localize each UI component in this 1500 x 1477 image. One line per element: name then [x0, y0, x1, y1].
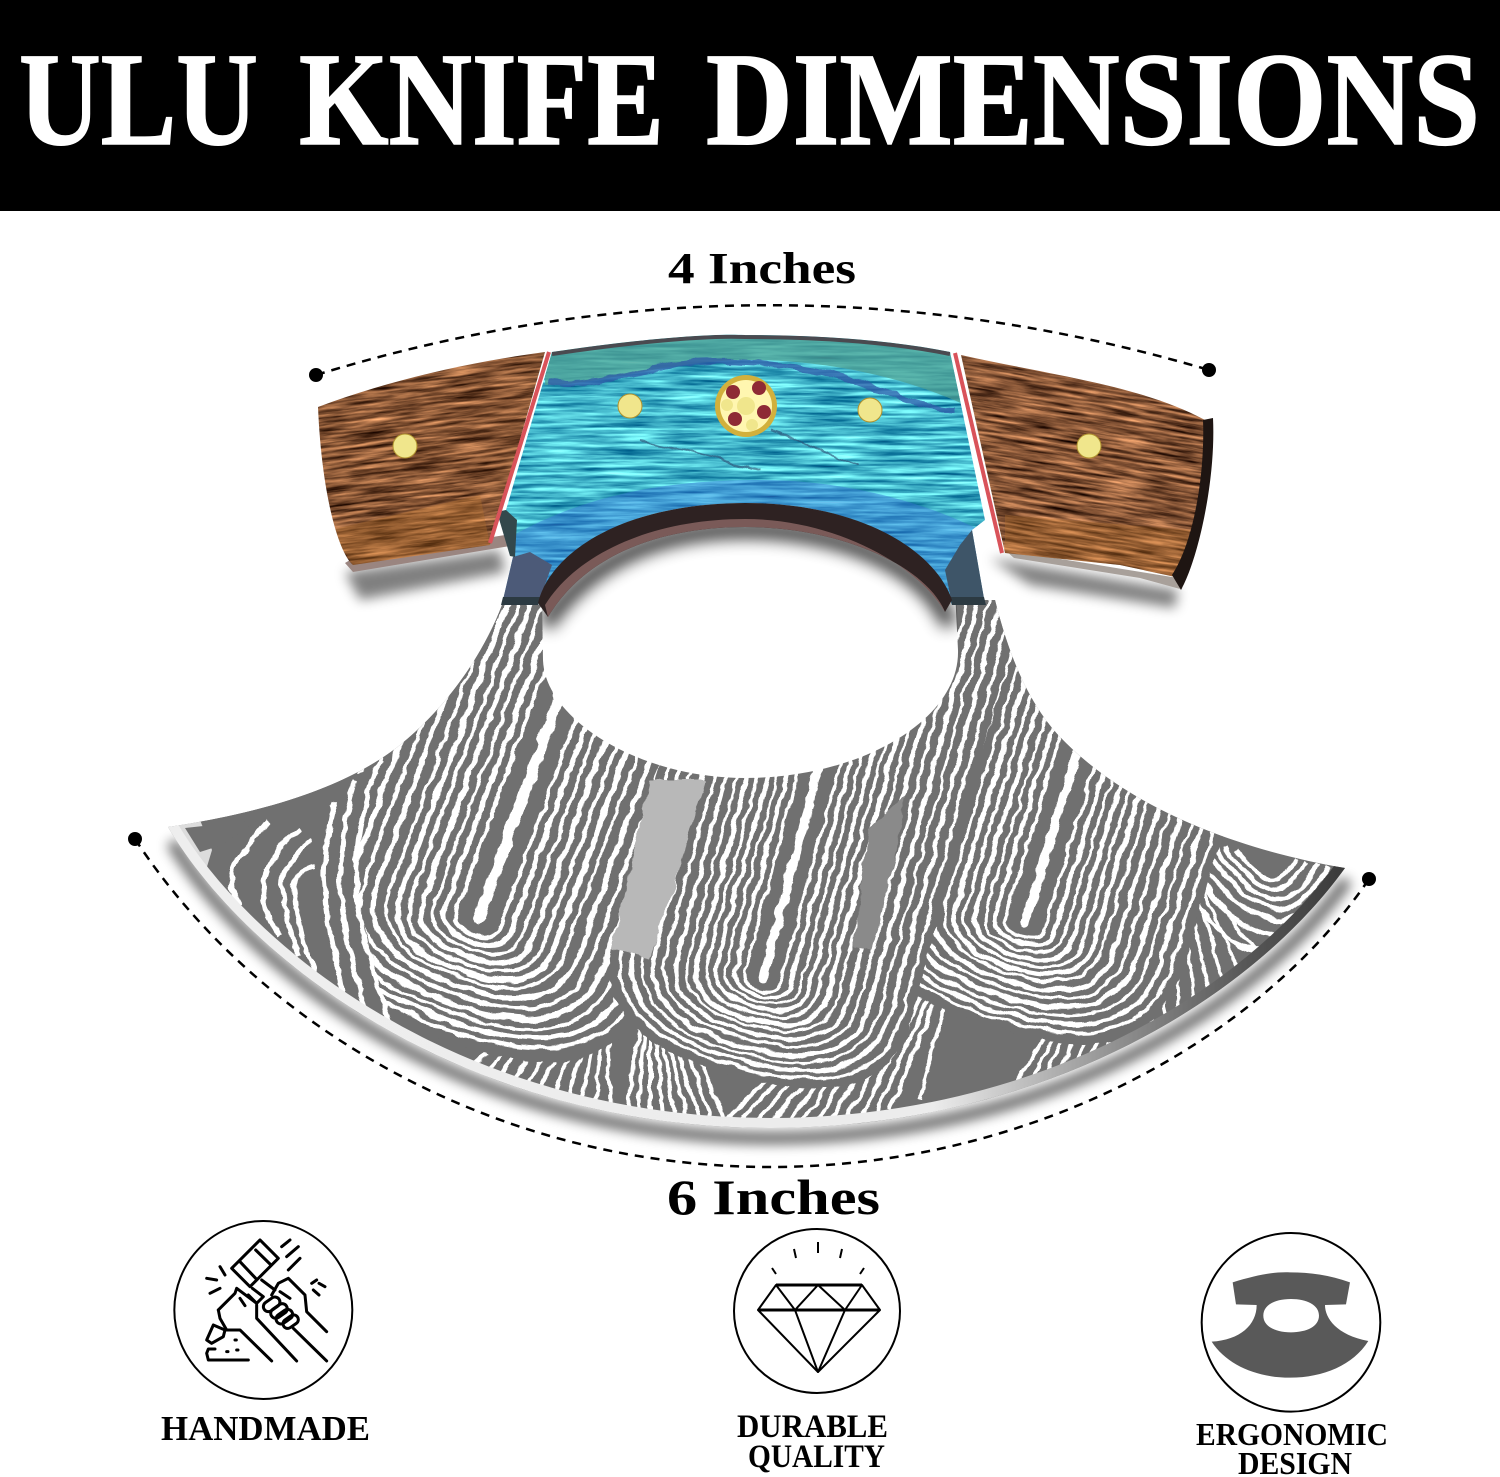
finger guard inner layer [545, 519, 945, 617]
finger hole [542, 590, 958, 778]
dashed arc: blade span [135, 839, 1369, 1167]
hole shadow [545, 530, 950, 625]
handle shadow: right [990, 558, 1178, 608]
red spacer: right [955, 353, 1002, 553]
backing for left tip curves [200, 772, 382, 1004]
feature: handmade [161, 1221, 370, 1448]
pakkawood center bolster [497, 334, 985, 605]
dashed arc: handle span [316, 305, 1209, 375]
rivet: right wood [1077, 434, 1101, 458]
label: 4 inches: 4 Inches [668, 244, 856, 293]
concentric curves near right tip [1199, 845, 1331, 952]
top green band [545, 335, 965, 405]
damascus blade [168, 600, 1345, 1128]
fan pattern: lower right of centre [725, 940, 960, 1124]
marker: left end [128, 832, 142, 846]
neck laminate: right [945, 530, 985, 604]
gray patch between folds [853, 795, 905, 950]
fan pattern: lower left [474, 1043, 614, 1102]
neck collar: left [501, 597, 540, 605]
mosaic pin [715, 375, 777, 437]
dark grain veins [640, 430, 860, 470]
ulu knife illustration [150, 273, 1360, 1140]
label: ergonomic: ERGONOMIC [1196, 1416, 1388, 1452]
title [19, 25, 1480, 173]
marker: right end [1362, 872, 1376, 886]
handle end grain: right [1172, 418, 1213, 590]
fan pattern: lower centre [626, 1029, 725, 1117]
wood scale: right [961, 355, 1205, 576]
icon: hands with hammer [174, 1221, 352, 1399]
handle underside: left metal strip [345, 535, 510, 572]
dimension: handle width 4 inches [309, 244, 1216, 382]
pale edge speckle: left tip [178, 822, 212, 866]
rivet: teal left [618, 394, 642, 418]
fan pattern: toward right tip [1015, 847, 1258, 1085]
handle shadow: left [345, 550, 505, 600]
neck collar: right [950, 597, 986, 605]
sharpened edge bevel [168, 827, 1345, 1128]
title banner [0, 0, 1500, 211]
wood scale: left [318, 352, 545, 565]
dark wedge at left tip [185, 826, 212, 852]
label: quality: QUALITY [748, 1439, 885, 1475]
rivet: teal right [858, 398, 882, 422]
dimension: blade width 6 inches [128, 832, 1376, 1225]
lower blue band [505, 480, 985, 610]
label: handmade: HANDMADE [161, 1409, 370, 1448]
feature: ergonomic design [1196, 1233, 1388, 1477]
blade shadow [172, 842, 1347, 1138]
feature: durable quality [734, 1229, 900, 1475]
title: ULU [19, 25, 258, 173]
neck notch: left [497, 510, 517, 557]
red spacer: left [490, 352, 549, 543]
title: KNIFE [299, 25, 664, 173]
finger guard arch [538, 503, 952, 617]
folded pattern: right [916, 651, 1223, 1045]
nested curves near left tip [231, 760, 392, 1025]
icon: diamond [734, 1229, 900, 1393]
bright forged strip [612, 780, 705, 958]
marker: left end [309, 368, 323, 382]
folded pattern: centre [610, 600, 1010, 1088]
handle underside: right metal strip [1005, 550, 1180, 589]
dark top rim [552, 337, 950, 354]
icon: ulu silhouette [1202, 1233, 1380, 1412]
rivet: left wood [393, 434, 417, 458]
neck laminate: left [502, 552, 552, 604]
blue vein [548, 361, 955, 410]
marker: right end [1202, 363, 1216, 377]
label: durable: DURABLE [737, 1409, 888, 1445]
folded pattern: left [350, 604, 660, 1063]
label: 6 inches: 6 Inches [667, 1169, 880, 1225]
